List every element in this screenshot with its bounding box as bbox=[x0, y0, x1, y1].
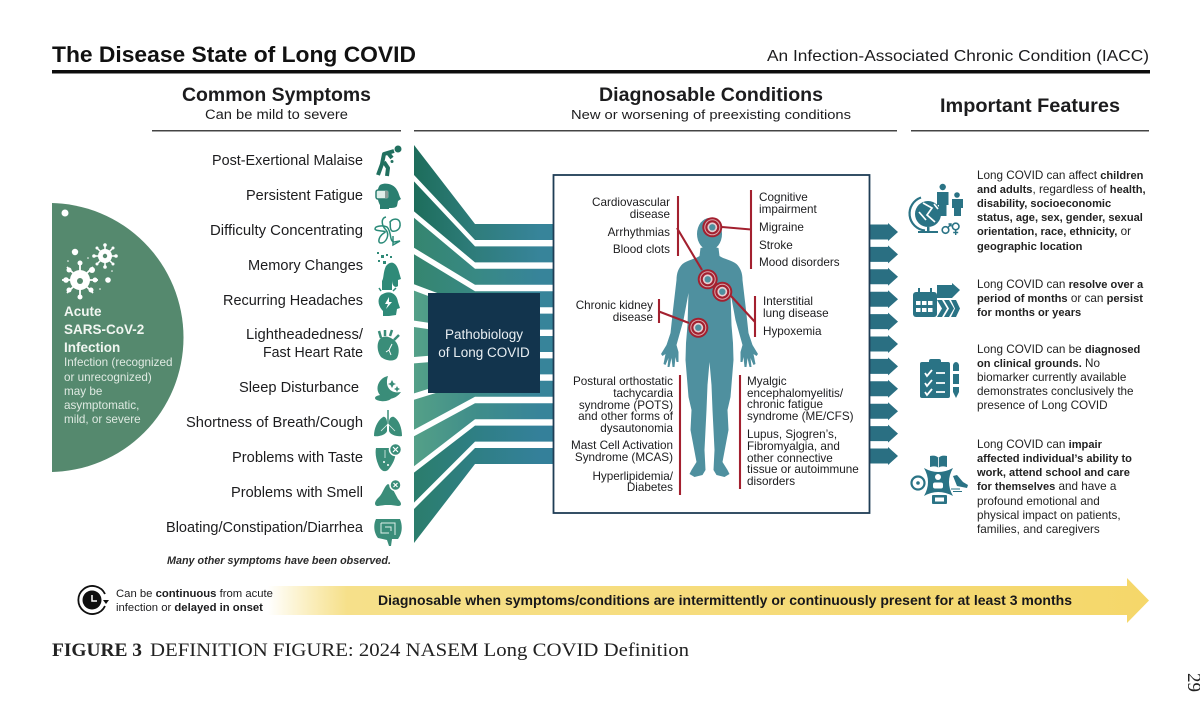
icon: sleep moon bbox=[375, 376, 401, 401]
text: acute infection: may be bbox=[64, 385, 102, 398]
conditions: ME/CFS and autoimmune: other connective bbox=[747, 452, 833, 465]
conditions: lung bbox=[763, 295, 829, 338]
icon: virus particles bbox=[62, 243, 118, 300]
conditions: cardiovascular: Blood clots bbox=[613, 243, 670, 256]
text: duration bbox=[977, 278, 1144, 319]
symptom list: Problems with Taste bbox=[232, 450, 363, 466]
icon: post-exertional malaise bbox=[378, 146, 402, 176]
conditions: neurological: Mood disorders bbox=[759, 256, 840, 269]
conditions: ME/CFS and autoimmune bbox=[747, 375, 859, 488]
symptom list: Recurring Headaches bbox=[223, 293, 363, 309]
symptom list: Bloating/Constipation/Diarrhea bbox=[166, 520, 364, 536]
conditions: cardiovascular: disease bbox=[630, 208, 670, 221]
conditions: dysautonomia and metabolic bbox=[571, 375, 674, 494]
text: acute infection: mild, or severe bbox=[64, 413, 141, 426]
text: who is affected: disability, socioeconomic bbox=[977, 198, 1111, 210]
note: other symptoms: Many other symptoms have been observed. bbox=[167, 555, 391, 567]
conditions: dysautonomia and metabolic: tachycardia bbox=[613, 387, 673, 400]
conditions: cardiovascular bbox=[592, 196, 670, 256]
icon: intestines bbox=[374, 519, 402, 546]
text: acute infection: Infection bbox=[64, 340, 120, 355]
conditions: neurological: Cognitive bbox=[759, 191, 808, 204]
text: who is affected bbox=[977, 169, 1146, 253]
symptom list: Memory Changes bbox=[248, 258, 363, 274]
symptom list: Fast Heart Rate bbox=[263, 345, 363, 361]
text: acute infection: or unrecognized) bbox=[64, 371, 152, 384]
heading: common symptoms bbox=[182, 85, 371, 122]
text: diagnosis: presence of Long COVID bbox=[977, 399, 1108, 412]
text: diagnosis: on clinical grounds. No bbox=[977, 357, 1100, 370]
subtitle: An Infection-Associated Chronic Condition (IACC) bbox=[767, 48, 1149, 65]
conditions: ME/CFS and autoimmune: tissue or autoimmune bbox=[747, 463, 859, 476]
timeline arrow: Diagnosable when symptoms/conditions are intermittently or continuously present for at least 3 months bbox=[378, 593, 1072, 608]
output arrows bbox=[870, 223, 898, 465]
conditions: ME/CFS and autoimmune: encephalomyelitis/ bbox=[747, 387, 844, 400]
icon: memory changes bbox=[377, 252, 401, 290]
conditions: cardiovascular: Cardiovascular bbox=[592, 196, 670, 209]
icon: lungs bbox=[374, 410, 402, 436]
text: functional impact: physical impact on patients, bbox=[977, 509, 1121, 522]
text: functional impact: affected individual’s ability to bbox=[977, 453, 1132, 465]
text: onset note bbox=[116, 588, 273, 614]
conditions: dysautonomia and metabolic: Mast Cell Activation bbox=[571, 439, 673, 452]
heading: common symptoms: Can be mild to severe bbox=[205, 107, 348, 122]
heading: common symptoms: Common Symptoms bbox=[182, 85, 371, 106]
title: The Disease State of Long COVID bbox=[52, 42, 416, 67]
text: who is affected: geographic location bbox=[977, 241, 1083, 253]
text: functional impact: work, attend school and care bbox=[976, 467, 1130, 479]
text: acute infection: Infection (recognized bbox=[64, 356, 172, 369]
conditions: lung: Hypoxemia bbox=[763, 325, 822, 338]
text: who is affected: status, age, sex, gender, sexual bbox=[977, 212, 1143, 224]
figure caption: FIGURE 3 bbox=[52, 641, 142, 661]
icon: population globe bbox=[910, 184, 963, 235]
symptom list bbox=[166, 153, 364, 536]
conditions: ME/CFS and autoimmune: Fibromyalgia, and bbox=[747, 440, 840, 453]
conditions: dysautonomia and metabolic: Diabetes bbox=[627, 481, 673, 494]
conditions: dysautonomia and metabolic: and other forms of bbox=[578, 410, 674, 423]
icon: taste bbox=[376, 444, 402, 471]
conditions: dysautonomia and metabolic: Syndrome (MCAS) bbox=[575, 451, 673, 464]
text: acute infection: SARS-CoV-2 bbox=[64, 322, 144, 337]
icon: clock bbox=[78, 586, 109, 614]
text: onset note: Can be continuous from acute bbox=[116, 588, 273, 600]
text: diagnosis: Long COVID can be diagnosed bbox=[977, 343, 1141, 356]
text: functional impact bbox=[976, 438, 1132, 536]
text: diagnosis: demonstrates conclusively the bbox=[977, 385, 1134, 398]
symptom list: Shortness of Breath/Cough bbox=[186, 415, 363, 431]
heading: diagnosable conditions: Diagnosable Conditions bbox=[599, 85, 823, 106]
conditions: dysautonomia and metabolic: dysautonomia bbox=[600, 422, 673, 435]
conditions: neurological: Stroke bbox=[759, 239, 793, 252]
text: who is affected: Long COVID can affect children bbox=[977, 169, 1144, 182]
conditions: dysautonomia and metabolic: Hyperlipidemia/ bbox=[592, 470, 674, 483]
timeline arrow bbox=[268, 578, 1149, 623]
icon: persistent fatigue bbox=[376, 184, 401, 209]
conditions: neurological: impairment bbox=[759, 203, 818, 216]
conditions: neurological: Migraine bbox=[759, 221, 804, 234]
conditions: ME/CFS and autoimmune: Myalgic bbox=[747, 375, 787, 388]
symptom list: Difficulty Concentrating bbox=[210, 223, 363, 239]
symptom list: Persistent Fatigue bbox=[246, 188, 363, 204]
text: who is affected: orientation, race, ethnicity, or bbox=[977, 225, 1131, 238]
box: pathobiology: Pathobiology bbox=[445, 327, 523, 342]
conditions: lung: lung disease bbox=[763, 307, 829, 320]
text: functional impact: for themselves and have a bbox=[977, 480, 1117, 493]
conditions: kidney: disease bbox=[613, 311, 653, 324]
heading: important features: Important Features bbox=[940, 96, 1120, 117]
target markers bbox=[688, 217, 732, 338]
body figure bbox=[661, 218, 758, 477]
panel: diagnosable conditions bbox=[554, 175, 870, 513]
text: functional impact: profound emotional and bbox=[977, 495, 1100, 508]
text: functional impact: families, and caregivers bbox=[977, 523, 1100, 536]
text: diagnosis bbox=[977, 343, 1141, 412]
heading: diagnosable conditions: New or worsening of preexisting conditions bbox=[571, 107, 852, 122]
icon: heart bbox=[378, 330, 399, 361]
text: duration: Long COVID can resolve over a bbox=[977, 278, 1144, 291]
conditions: ME/CFS and autoimmune: chronic fatigue bbox=[747, 398, 823, 411]
icon: clipboard and pen bbox=[920, 359, 959, 398]
conditions: kidney bbox=[576, 299, 653, 324]
text: onset note: infection or delayed in onset bbox=[116, 602, 263, 614]
text: duration: for months or years bbox=[977, 307, 1081, 319]
icon: daily life impact bbox=[912, 456, 968, 504]
text: who is affected: and adults, regardless of health, bbox=[977, 183, 1146, 196]
symptom list: Sleep Disturbance bbox=[239, 380, 359, 396]
icon: difficulty concentrating bbox=[375, 217, 400, 245]
heading: diagnosable conditions bbox=[571, 85, 852, 122]
panel: acute infection semicircle bbox=[52, 203, 184, 472]
flow bands from symptoms to pathobiology bbox=[414, 145, 553, 543]
text: acute infection bbox=[64, 304, 172, 426]
conditions: kidney: Chronic kidney bbox=[576, 299, 653, 312]
text: duration: period of months or can persist bbox=[977, 292, 1143, 305]
conditions: ME/CFS and autoimmune: syndrome (ME/CFS) bbox=[747, 410, 854, 423]
conditions: ME/CFS and autoimmune: Lupus, Sjogren’s, bbox=[747, 428, 837, 441]
symptom list: Post-Exertional Malaise bbox=[212, 153, 363, 169]
conditions: dysautonomia and metabolic: syndrome (POTS) bbox=[579, 399, 673, 412]
box: pathobiology bbox=[428, 293, 540, 393]
text: functional impact: Long COVID can impair bbox=[977, 438, 1103, 451]
conditions: ME/CFS and autoimmune: disorders bbox=[747, 475, 795, 488]
conditions: neurological bbox=[759, 191, 840, 269]
conditions: dysautonomia and metabolic: Postural orthostatic bbox=[573, 375, 673, 388]
icon: recurring headaches bbox=[379, 286, 400, 316]
text: diagnosis: biomarker currently available bbox=[977, 371, 1126, 384]
red connector lines bbox=[659, 190, 755, 495]
symptom list: Lightheadedness/ bbox=[246, 327, 364, 343]
text: acute infection: Acute bbox=[64, 304, 102, 319]
symptom list: Problems with Smell bbox=[231, 485, 363, 501]
conditions: cardiovascular: Arrhythmias bbox=[608, 226, 670, 239]
icon: smell bbox=[375, 480, 401, 506]
box: pathobiology: of Long COVID bbox=[438, 345, 530, 360]
text: acute infection: asymptomatic, bbox=[64, 399, 139, 412]
icon: calendar with arrows bbox=[913, 283, 960, 317]
figure caption: DEFINITION FIGURE: 2024 NASEM Long COVID Definition bbox=[150, 641, 689, 661]
conditions: lung: Interstitial bbox=[763, 295, 813, 308]
